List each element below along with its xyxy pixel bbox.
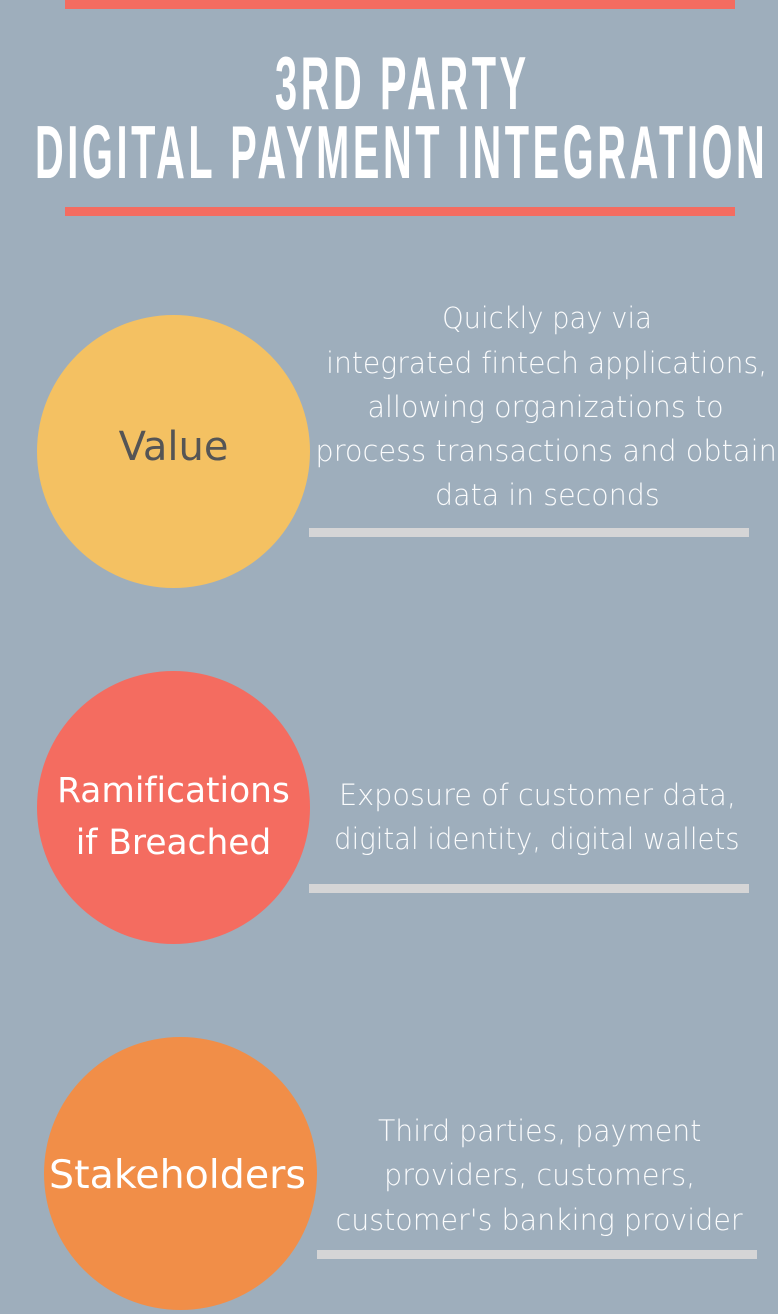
divider: stakeholders [317, 1250, 757, 1259]
text: value description: process transactions and obtain [316, 434, 777, 468]
circle: stakeholders [44, 1037, 317, 1310]
label: ramifications: Ramifications [57, 771, 290, 811]
circle: value [37, 315, 310, 588]
text: ramifications description [334, 778, 739, 856]
panel: ramifications [37, 671, 749, 944]
text: stakeholders description: customer's banking provider [336, 1202, 743, 1236]
text: stakeholders description [336, 1114, 743, 1236]
label: ramifications: if Breached [76, 823, 271, 863]
divider: ramifications [309, 884, 749, 893]
text: stakeholders description: Third parties, payment [378, 1114, 702, 1148]
title: DIGITAL PAYMENT INTEGRATION [35, 110, 768, 194]
panel: stakeholders [44, 1037, 757, 1310]
text: value description [316, 301, 777, 512]
title underline bar [65, 207, 735, 216]
text: value description: data in seconds [435, 478, 659, 512]
label: value: Value [119, 424, 228, 470]
divider: value [309, 528, 749, 537]
text: stakeholders description: providers, customers, [384, 1158, 696, 1192]
panel: value [37, 301, 777, 588]
text: ramifications description: digital identity, digital wallets [334, 822, 739, 856]
circle: ramifications [37, 671, 310, 944]
title [35, 41, 768, 194]
text: value description: integrated fintech applications, [326, 346, 768, 380]
text: value description: Quickly pay via [442, 301, 652, 335]
text: value description: allowing organizations to [368, 390, 724, 424]
top accent bar [65, 0, 735, 9]
label: stakeholders: Stakeholders [49, 1152, 306, 1198]
text: ramifications description: Exposure of customer data, [339, 778, 736, 812]
title: 3RD PARTY [275, 41, 530, 125]
label: ramifications [57, 771, 290, 863]
